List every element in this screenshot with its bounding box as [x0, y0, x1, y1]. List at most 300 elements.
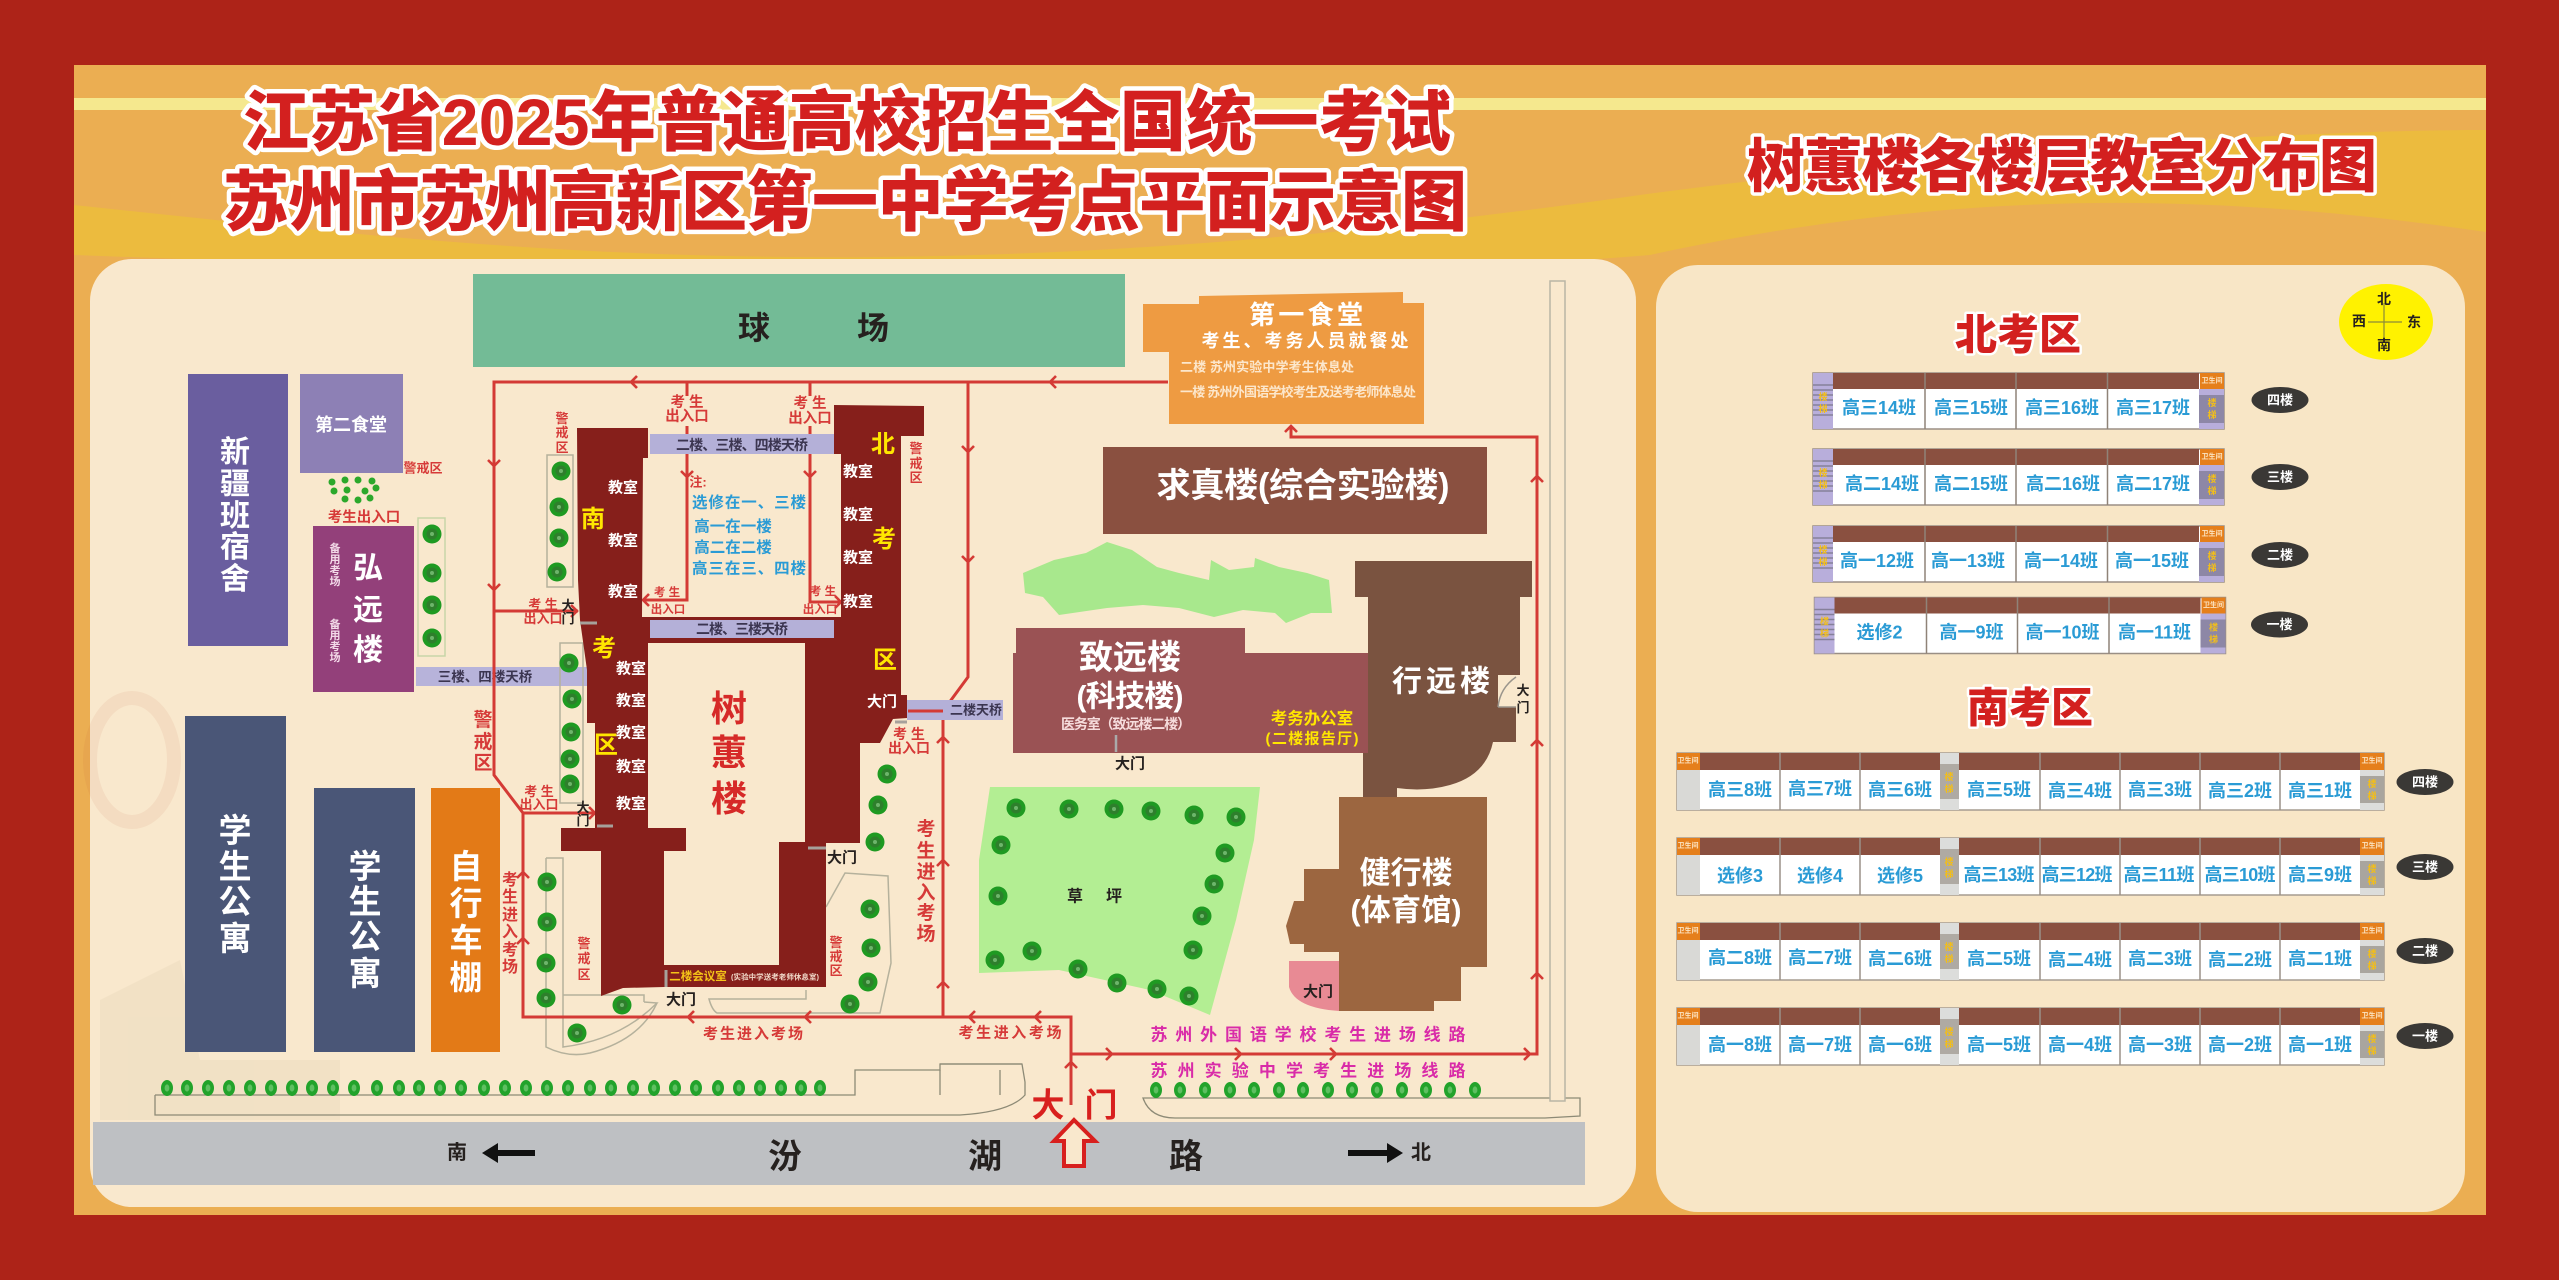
tree row: north of gate [1150, 1082, 1481, 1098]
tree row: south of gate [161, 1080, 826, 1096]
building: student dorm 2: 公 [348, 918, 382, 954]
south floor 2: 卫生间 [2362, 926, 2382, 934]
north floor 2: 高一13班 [1931, 550, 2005, 571]
route labels: 场 [916, 922, 936, 944]
building: Xingyuan: 行远楼 [1392, 666, 1490, 698]
entrance labels: 出入口 [665, 408, 709, 425]
route labels: 考 [502, 940, 518, 958]
building: Hongyuan: 用 [330, 629, 340, 642]
heading: north exam area: 北考区 [1955, 312, 2081, 358]
classrooms [608, 462, 873, 812]
building: Shuhui [561, 405, 924, 996]
north floor 1: 楼 [1820, 616, 1829, 626]
cordon labels: 戒 [577, 950, 591, 966]
classrooms: 教室 [608, 478, 638, 496]
south floor 3: 卫生间 [2362, 840, 2382, 850]
north zone label: 北 [871, 430, 895, 458]
north floor 3: 高二14班 [1845, 473, 1919, 494]
entrance labels: 出入口 [888, 740, 930, 756]
arrow: entrance [1054, 1120, 1095, 1166]
classrooms: 教室 [843, 548, 873, 566]
note: floor distribution: 注: [689, 474, 707, 490]
south floor 1: 高一4班 [2048, 1034, 2112, 1055]
label: Hongyuan entrance: 考生出入口 [328, 509, 400, 526]
door labels [561, 598, 857, 1008]
cordon labels: 警 [473, 708, 493, 730]
classrooms: 教室 [616, 758, 646, 776]
building: Xingyuan [1355, 561, 1532, 797]
title: classroom distribution: 树蕙楼各楼层教室分布图 [1747, 134, 2377, 200]
roadside outlines [155, 1064, 1580, 1118]
south floor 4: 高三7班 [1788, 778, 1852, 799]
north floor 3: 三楼 [2267, 470, 2293, 484]
north floor 4: 楼 [2207, 397, 2217, 408]
classrooms: 教室 [616, 794, 646, 812]
south zone label: 区 [594, 732, 618, 758]
route labels: 入 [916, 882, 936, 904]
south floor 4: 高三6班 [1868, 779, 1932, 800]
north gate label: 大门 [867, 692, 897, 710]
south floor 1: 高一5班 [1967, 1034, 2031, 1055]
south floor 2: 二楼 [2412, 944, 2438, 958]
south floor 3: 选修4 [1797, 866, 1843, 886]
route labels: 考 [502, 870, 518, 888]
building: student dorm 2 [314, 788, 415, 1052]
building: student dorm 2: 生 [348, 882, 382, 920]
entrance labels: 出入口 [651, 602, 685, 616]
entrance labels: 考 生 [793, 395, 827, 412]
south floor 1: 高一8班 [1708, 1034, 1772, 1055]
south floor 1: 楼 [1944, 1026, 1954, 1037]
football court: 场 [857, 310, 889, 346]
building: Hongyuan [313, 526, 414, 692]
panel: campus map [90, 259, 1636, 1207]
entrance labels: 考 生 [670, 394, 704, 411]
south floor 1: 高一7班 [1788, 1034, 1852, 1055]
building: student dorm 1 [185, 716, 286, 1052]
building: student dorm 1: 公 [218, 882, 252, 920]
building: first canteen: 考生、考务人员就餐处 [1202, 331, 1408, 351]
cordon labels: 区 [909, 470, 923, 484]
map background [90, 259, 1636, 1207]
cordon labels: 区 [577, 966, 591, 982]
trees beside Hongyuan [418, 518, 445, 656]
north floor 4: 高三16班 [2025, 397, 2099, 418]
north floor 4: 四楼 [2267, 392, 2293, 408]
door labels: 门 [576, 812, 590, 828]
note: floor distribution: 高三在三、四楼 [692, 558, 806, 578]
cordon labels: 区 [555, 440, 569, 454]
north zone label: 区 [873, 646, 897, 674]
compass: 西 [2352, 313, 2366, 329]
skybridge: third and fourth floor: 三楼、四楼天桥 [438, 668, 533, 684]
building: Qiuzhen: 求真楼(综合实验楼) [1156, 467, 1450, 505]
cordon labels: 警 [829, 934, 843, 950]
building: Qiuzhen [1103, 447, 1487, 534]
south floor 2: 高二3班 [2128, 948, 2192, 969]
south floor 4: 四楼 [2412, 774, 2438, 790]
north floor 1: 高一9班 [1939, 622, 2004, 642]
route arrows [488, 376, 1543, 1068]
door labels: 门 [561, 610, 575, 626]
classrooms: 教室 [616, 660, 646, 678]
entrance labels [519, 394, 930, 812]
building: Jianxing gym: 大门 [1303, 982, 1333, 1000]
south floor 1: 卫生间 [1678, 1010, 1698, 1020]
building: Zhiyuan: (科技楼) [1076, 680, 1184, 714]
lawn: 草 [1067, 888, 1083, 906]
trees around Shuhui [536, 462, 896, 1042]
football court: 球 [738, 310, 770, 346]
south direction [447, 1141, 535, 1164]
building: bicycle shed [431, 788, 500, 1052]
building: Zhiyuan: 致远楼 [1079, 639, 1181, 677]
north floor 1: 梯 [1820, 628, 1829, 638]
south floor 1: 高一1班 [2288, 1034, 2352, 1055]
pink entrance [1289, 961, 1339, 1011]
lawn: 坪 [1106, 888, 1122, 906]
road: 路 [1169, 1138, 1203, 1176]
cordon labels: 警 [555, 410, 569, 426]
north floor 3: 楼 [1818, 467, 1828, 478]
north floor 1 [1814, 598, 2308, 654]
building: Xinjiang class dormitory [188, 374, 288, 646]
note: floor distribution: 选修在一、三楼 [692, 492, 806, 512]
building: first canteen: 二楼 苏州实验中学考生体息处 [1180, 360, 1354, 374]
north floor 2: 二楼 [2267, 548, 2293, 562]
route labels: 考 [916, 902, 936, 924]
note: floor distribution: 高一在一楼 [694, 516, 772, 536]
building: Jianxing gym [1286, 797, 1487, 1011]
cordon labels: 戒 [473, 730, 493, 752]
door labels: 大门 [666, 990, 696, 1008]
north floor 1: 高一11班 [2118, 622, 2191, 642]
note: floor distribution: 高二在二楼 [694, 538, 772, 556]
north floor 2: 梯 [1818, 556, 1828, 567]
south floor 3: 高三9班 [2288, 864, 2352, 885]
south floor 1: 高一3班 [2128, 1034, 2192, 1055]
skybridge: second floor: 二楼天桥 [950, 702, 1002, 718]
building: first canteen [1143, 292, 1424, 424]
south floor 3: 高三10班 [2204, 864, 2276, 885]
south floor 2: 高二2班 [2208, 949, 2272, 970]
building: Xingyuan: 大 [1516, 682, 1530, 698]
south floor 4: 高三1班 [2288, 780, 2352, 801]
shrubs by canteen [328, 476, 380, 504]
building: student dorm 1: 学 [218, 812, 252, 848]
south floor 1: 楼 [2367, 1033, 2377, 1044]
north floor 3: 楼 [2207, 473, 2217, 484]
north floor 1: 选修2 [1856, 622, 1903, 642]
entrance labels: 考 生 [524, 784, 554, 798]
route labels: 场 [502, 958, 518, 976]
building: Hongyuan: 用 [330, 553, 340, 566]
door labels: 大 [576, 800, 590, 814]
north floor 2: 高一12班 [1840, 550, 1914, 571]
classrooms: 教室 [843, 506, 873, 524]
exam office [1266, 708, 1358, 748]
panel background [1656, 265, 2465, 1212]
south floor 3: 选修5 [1877, 866, 1923, 886]
south floor 3 [1677, 838, 2454, 895]
route labels: 考 [916, 818, 936, 840]
building: first canteen: 一楼 苏州外国语学校考生及送考老师体息处 [1180, 384, 1416, 400]
title: exam site plan: 苏州市苏州高新区第一中学考点平面示意图 [223, 165, 1467, 239]
skybridge: floors two to four: 二楼、三楼、四楼天桥 [676, 437, 808, 453]
north floor 2 [1813, 526, 2308, 582]
south floor 1: 一楼 [2412, 1028, 2438, 1044]
south floor 4 [1677, 753, 2454, 810]
south floor 3: 梯 [2367, 875, 2377, 886]
north floor 1: 卫生间 [2203, 600, 2224, 609]
north floor 2: 卫生间 [2202, 528, 2222, 538]
skybridge: floors two and three [650, 620, 834, 638]
north floor 4: 楼 [1818, 391, 1828, 402]
building: student dorm 2: 学 [348, 848, 382, 884]
entrance labels: 出入口 [803, 602, 837, 616]
building: student dorm 1: 生 [218, 848, 252, 884]
building: bicycle shed: 车 [450, 922, 482, 958]
south floor 2: 高二5班 [1967, 948, 2031, 969]
entrance labels: 考 生 [528, 596, 558, 612]
south floor 1: 高一2班 [2208, 1034, 2272, 1055]
south floor 3: 梯 [1944, 868, 1954, 879]
south floor 1: 卫生间 [2362, 1010, 2382, 1020]
building name: 蕙 [711, 732, 747, 772]
south floor 3: 高三13班 [1964, 864, 2034, 885]
green shrub area [1023, 542, 1332, 623]
north floor 4: 高三17班 [2116, 397, 2190, 418]
compass: 南 [2377, 337, 2391, 353]
south floor 4: 高三2班 [2208, 780, 2272, 801]
Shuhui footprint [561, 405, 924, 996]
main gate [1032, 1086, 1118, 1166]
building: Zhiyuan: 大门 [1115, 754, 1145, 772]
door [1498, 677, 1516, 707]
compass: 东 [2407, 314, 2421, 330]
building: bicycle shed: 自 [450, 848, 482, 884]
building: Hongyuan: 远 [353, 594, 383, 626]
entrance labels: 考 生 [810, 584, 836, 598]
north floor 1: 高一10班 [2025, 622, 2100, 642]
classrooms: 教室 [616, 692, 646, 710]
north direction: 北 [1411, 1141, 1431, 1164]
south floor 2: 高二8班 [1708, 947, 1772, 968]
south floor 1: 梯 [1944, 1038, 1954, 1049]
route labels: 考生进入考场 [958, 1024, 1062, 1042]
cordon labels: 戒 [909, 456, 923, 470]
building: second canteen: 第二食堂 [315, 414, 387, 435]
north floor 1: 梯 [2209, 634, 2218, 644]
route labels: 入 [502, 922, 518, 940]
building: Xinjiang class dormitory: 新 [220, 436, 250, 468]
building: Hongyuan: 备 [330, 541, 340, 555]
building: student dorm 2: 寓 [348, 954, 382, 992]
watermark emblem [90, 698, 340, 1120]
north floor 4: 高三14班 [1842, 397, 1916, 418]
south floor 3: 楼 [1944, 856, 1954, 867]
building: Zhiyuan [1013, 628, 1368, 772]
south floor 4: 高三3班 [2128, 779, 2192, 800]
north floor 3 [1813, 449, 2308, 505]
south floor 3: 楼 [2367, 863, 2377, 874]
north floor 2: 楼 [2207, 550, 2217, 561]
north floor 4 [1813, 373, 2308, 429]
south floor 2: 卫生间 [1678, 926, 1698, 934]
south floor 4: 卫生间 [1678, 756, 1698, 764]
building: Jianxing gym: (体育馆) [1350, 894, 1462, 928]
meeting room [669, 969, 820, 983]
route labels: 进 [502, 906, 518, 924]
exam office: (二楼报告厅) [1266, 730, 1358, 748]
entrance labels: 出入口 [788, 410, 832, 427]
south floor 1 [1677, 1008, 2454, 1065]
north floor 4: 梯 [2207, 409, 2217, 420]
cordon labels: 警 [577, 936, 591, 950]
south floor 4: 楼 [2367, 778, 2377, 789]
south floor 2: 高二6班 [1868, 948, 1932, 969]
building: Xingyuan: 门 [1516, 700, 1530, 714]
cordon labels: 戒 [829, 948, 843, 964]
south floor 4: 梯 [1944, 783, 1954, 794]
north floor 4: 梯 [1818, 403, 1828, 414]
building: Hongyuan: 备 [330, 617, 340, 631]
south floor 2: 高二4班 [2048, 949, 2112, 970]
route labels: 生 [502, 888, 518, 906]
garden outlines around Shuhui [546, 455, 891, 1055]
south floor 3: 选修3 [1717, 866, 1763, 886]
building: second canteen [300, 374, 403, 473]
building: Hongyuan: 弘 [353, 552, 383, 584]
building: Hongyuan: 考 [330, 640, 340, 653]
route labels [502, 818, 1062, 1042]
north floor 3: 高二17班 [2116, 473, 2190, 494]
building: student dorm 1: 寓 [218, 920, 252, 956]
main gate: 大 [1032, 1086, 1064, 1124]
building: Xinjiang class dormitory: 班 [220, 500, 250, 532]
door labels: 大 [561, 598, 575, 612]
south zone label: 南 [581, 506, 605, 532]
entrance labels: 出入口 [523, 610, 563, 626]
doors [580, 623, 907, 987]
south zone label: 考 [592, 634, 616, 662]
north floor 2: 高一14班 [2024, 550, 2098, 571]
heading: south exam area: 南考区 [1967, 684, 2093, 732]
north floor 4: 高三15班 [1934, 397, 2008, 418]
compass: 北 [2377, 291, 2391, 307]
legend: Foreign Language School route: 苏州外国语学校考生进场线路 [1150, 1024, 1466, 1044]
south floor 2: 梯 [2367, 960, 2377, 971]
legend: Experimental School route: 苏州实验中学考生进场线路 [1150, 1060, 1466, 1080]
south floor 1: 高一6班 [1868, 1034, 1932, 1055]
skybridge: third and fourth floor [416, 667, 587, 686]
north floor 4: 卫生间 [2202, 376, 2222, 384]
road: 汾 [768, 1138, 802, 1176]
door labels: 大门 [827, 848, 857, 866]
south floor 2: 梯 [1944, 953, 1954, 964]
south floor 2: 高二7班 [1788, 947, 1852, 968]
main gate: 门 [1084, 1086, 1118, 1124]
south floor 3: 三楼 [2412, 860, 2438, 874]
cordon labels: 警 [909, 440, 923, 456]
south floor 3: 高三12班 [2042, 864, 2112, 885]
south floor 3: 卫生间 [1678, 840, 1698, 850]
skybridge: floors two and three: 二楼、三楼天桥 [696, 621, 788, 637]
south floor 3: 高三11班 [2124, 864, 2194, 885]
skybridge: second floor [907, 700, 1003, 720]
south floor 4: 卫生间 [2362, 756, 2382, 764]
red routes [494, 382, 1537, 1105]
building: bicycle shed: 行 [450, 884, 482, 922]
panel: classroom distribution [1656, 265, 2465, 1212]
building: Hongyuan: 场 [330, 651, 340, 664]
lawn [979, 787, 1260, 1015]
route labels: 考生进入考场 [703, 1026, 803, 1042]
building: Xinjiang class dormitory: 舍 [220, 562, 250, 596]
north floor 1: 楼 [2209, 622, 2218, 632]
building: Zhiyuan: 医务室（致远楼二楼） [1061, 716, 1191, 732]
route labels: 进 [916, 860, 936, 882]
south floor 2: 高二1班 [2288, 948, 2352, 969]
note: floor distribution [689, 474, 806, 578]
south floor 4: 梯 [2367, 790, 2377, 801]
title: exam site plan [223, 85, 1467, 239]
building: Xinjiang class dormitory: 宿 [220, 530, 250, 564]
south floor 1: 梯 [2367, 1045, 2377, 1056]
road: 湖 [968, 1138, 1002, 1176]
cordon labels [473, 410, 923, 982]
building: Jianxing gym: 健行楼 [1360, 856, 1452, 890]
south floor 2: 楼 [2367, 948, 2377, 959]
south floor 2: 楼 [1944, 941, 1954, 952]
north floor 2: 梯 [2207, 562, 2217, 573]
exam office: 考务办公室 [1271, 708, 1353, 728]
north floor 1: 一楼 [2266, 617, 2293, 632]
building: Xinjiang class dormitory: 疆 [220, 468, 250, 500]
north floor 2: 楼 [1818, 544, 1828, 555]
door [1115, 735, 1117, 752]
north floor 3: 高二15班 [1934, 473, 2008, 494]
building: Hongyuan: 楼 [353, 634, 383, 666]
north floor 3: 高二16班 [2026, 473, 2100, 494]
meeting room: (实验中学送考老师休息室) [731, 972, 820, 982]
football court [473, 274, 1125, 367]
south floor 4: 高三4班 [2048, 780, 2112, 801]
classrooms: 教室 [608, 582, 638, 600]
classrooms: 教室 [843, 462, 873, 480]
classrooms: 教室 [608, 532, 638, 550]
south floor 4: 高三8班 [1708, 779, 1772, 800]
entrance labels: 考 生 [893, 726, 925, 742]
north direction [1348, 1141, 1431, 1164]
north floor 3: 梯 [2207, 485, 2217, 496]
building: Hongyuan: 考 [330, 564, 340, 577]
skybridge: floors two to four [650, 434, 834, 454]
classrooms: 教室 [843, 592, 873, 610]
cordon labels: 区 [829, 962, 843, 978]
title: exam site plan: 江苏省2025年普通高校招生全国统一考试 [243, 85, 1451, 159]
cordon labels: 区 [473, 752, 493, 774]
north zone label: 考 [872, 526, 896, 552]
north floor 2: 高一15班 [2115, 550, 2189, 571]
building name: 楼 [711, 778, 747, 818]
south direction: 南 [447, 1141, 467, 1164]
campus wall [1550, 281, 1565, 1101]
entrance labels: 考 生 [654, 585, 680, 599]
route labels: 生 [916, 840, 936, 862]
south floor 4: 楼 [1944, 771, 1954, 782]
building: first canteen: 第一食堂 [1249, 300, 1363, 330]
